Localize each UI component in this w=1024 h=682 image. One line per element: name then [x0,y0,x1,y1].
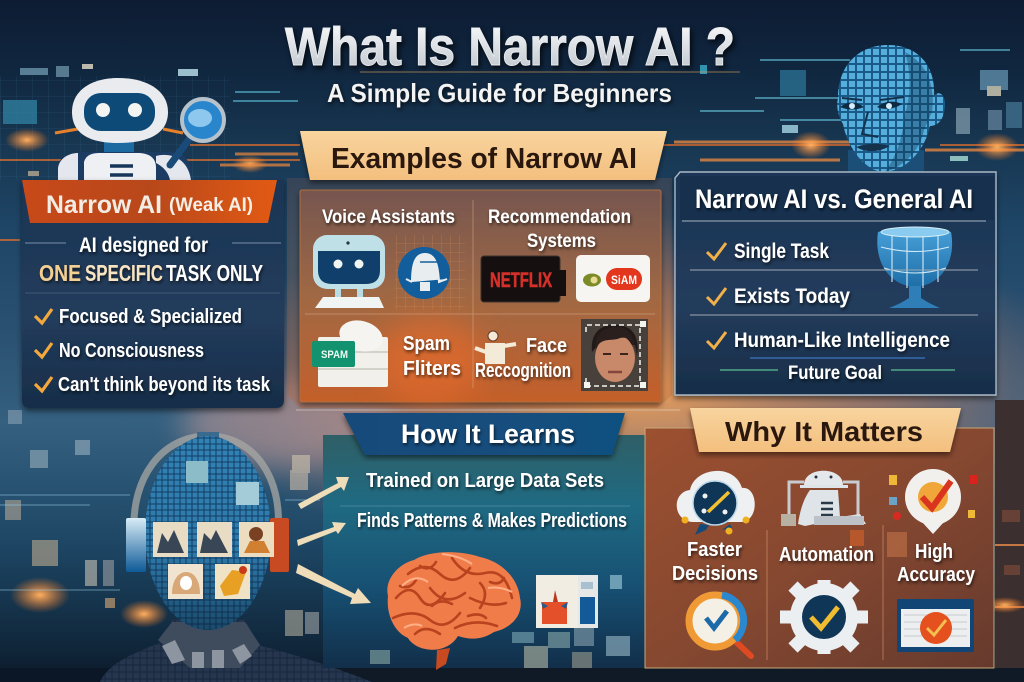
title rule [360,71,740,73]
icon: cloud decisions [677,471,755,535]
panel: examples of narrow AI [287,131,680,410]
icon: globe cup [877,227,952,308]
label: high accuracy: Accuracy [897,564,976,586]
icon: person figure [475,331,516,364]
image: scanned face [581,319,648,391]
label: face recognition: Face [526,335,567,357]
ribbon: why it matters heading [690,408,961,452]
icon: voice assistant disc [398,247,450,299]
future goal label: Future Goal [788,363,882,384]
label: high accuracy [897,541,976,586]
definition text: TASK ONLY [166,260,263,286]
text: learning steps [357,470,627,532]
ribbon: examples heading: Examples of Narrow AI [331,143,637,175]
labels: voice and recommendation: Voice Assistants [322,207,455,228]
icon: document box [536,575,598,628]
checklist: comparison rows: Single Task [734,240,829,263]
checklist: comparison rows: Exists Today [734,285,850,308]
ribbon: examples heading [300,131,667,180]
arrow: to data sets [298,477,349,509]
label: face recognition [475,335,571,382]
ribbon: how it learns heading: How It Learns [401,419,575,449]
definition text [25,234,281,286]
label: face recognition: Reccognition [475,360,571,382]
illustration: digital human head [837,45,945,178]
label: automation: Automation [779,544,874,566]
label: faster decisions [672,539,758,585]
checklist: narrow AI traits [35,306,271,396]
icon: netflix: NETFLIX [490,269,552,292]
label: faster decisions: Faster [687,539,742,561]
ribbon: how it learns heading [343,413,625,455]
label: high accuracy: High [915,541,953,563]
text: learning steps: Finds Patterns & Makes Predictions [357,510,627,532]
icon: gear check [780,580,868,654]
label: spam filters: Fliters [403,358,461,380]
label: faster decisions: Decisions [672,563,758,585]
ribbon: narrow AI heading: (Weak AI) [169,195,253,216]
label: spam filters [403,333,461,380]
labels: voice and recommendation [322,207,631,252]
text: learning steps: Trained on Large Data Sets [366,470,604,492]
checklist: comparison rows [707,240,950,352]
labels: voice and recommendation: Recommendation [488,207,631,228]
icon: magnifier check [689,595,751,656]
icon: accuracy card [897,599,974,652]
illustration: data-learning head [100,432,372,682]
ribbon: narrow AI heading [22,180,277,223]
icon: siam card [576,255,650,302]
ribbon: why it matters heading: Why It Matters [725,416,923,447]
arrow: to patterns [297,522,346,546]
decorative data tiles [370,575,630,668]
panel: how it learns [296,413,645,670]
definition text: AI designed for [79,234,208,257]
data thumbnails [153,522,274,599]
panel: narrow AI vs general AI [675,172,996,395]
icon: voice robot monitor [313,235,385,308]
label: spam filters: Spam [403,333,450,355]
icon: brain [387,552,521,670]
icon: automation robot [781,471,866,526]
definition text: SPECIFIC [85,260,163,286]
icon: netflix [481,256,566,302]
subtitle: A Simple Guide for Beginners [327,78,672,108]
title: What Is Narrow AI ? [285,17,735,77]
icon: siam card: SiAM [611,273,637,287]
icon: spam filter [312,316,388,387]
panel: narrow AI definition [22,180,284,408]
labels: voice and recommendation: Systems [527,231,596,252]
checklist: narrow AI traits: Can't think beyond its task [58,374,271,396]
definition text: ONE [39,260,81,286]
arrow: to brain [296,564,371,604]
icon: accuracy target [889,469,977,534]
heading: comparison: Narrow AI vs. General AI [695,184,973,214]
ribbon: narrow AI heading: Narrow AI [46,191,162,219]
panel: why it matters [645,408,994,668]
checklist: comparison rows: Human-Like Intelligence [734,329,950,352]
icon: spam filter: SPAM [321,349,348,361]
checklist: narrow AI traits: No Consciousness [59,340,204,362]
checklist: narrow AI traits: Focused & Specialized [59,306,242,328]
icon: robot with magnifier [55,78,224,180]
